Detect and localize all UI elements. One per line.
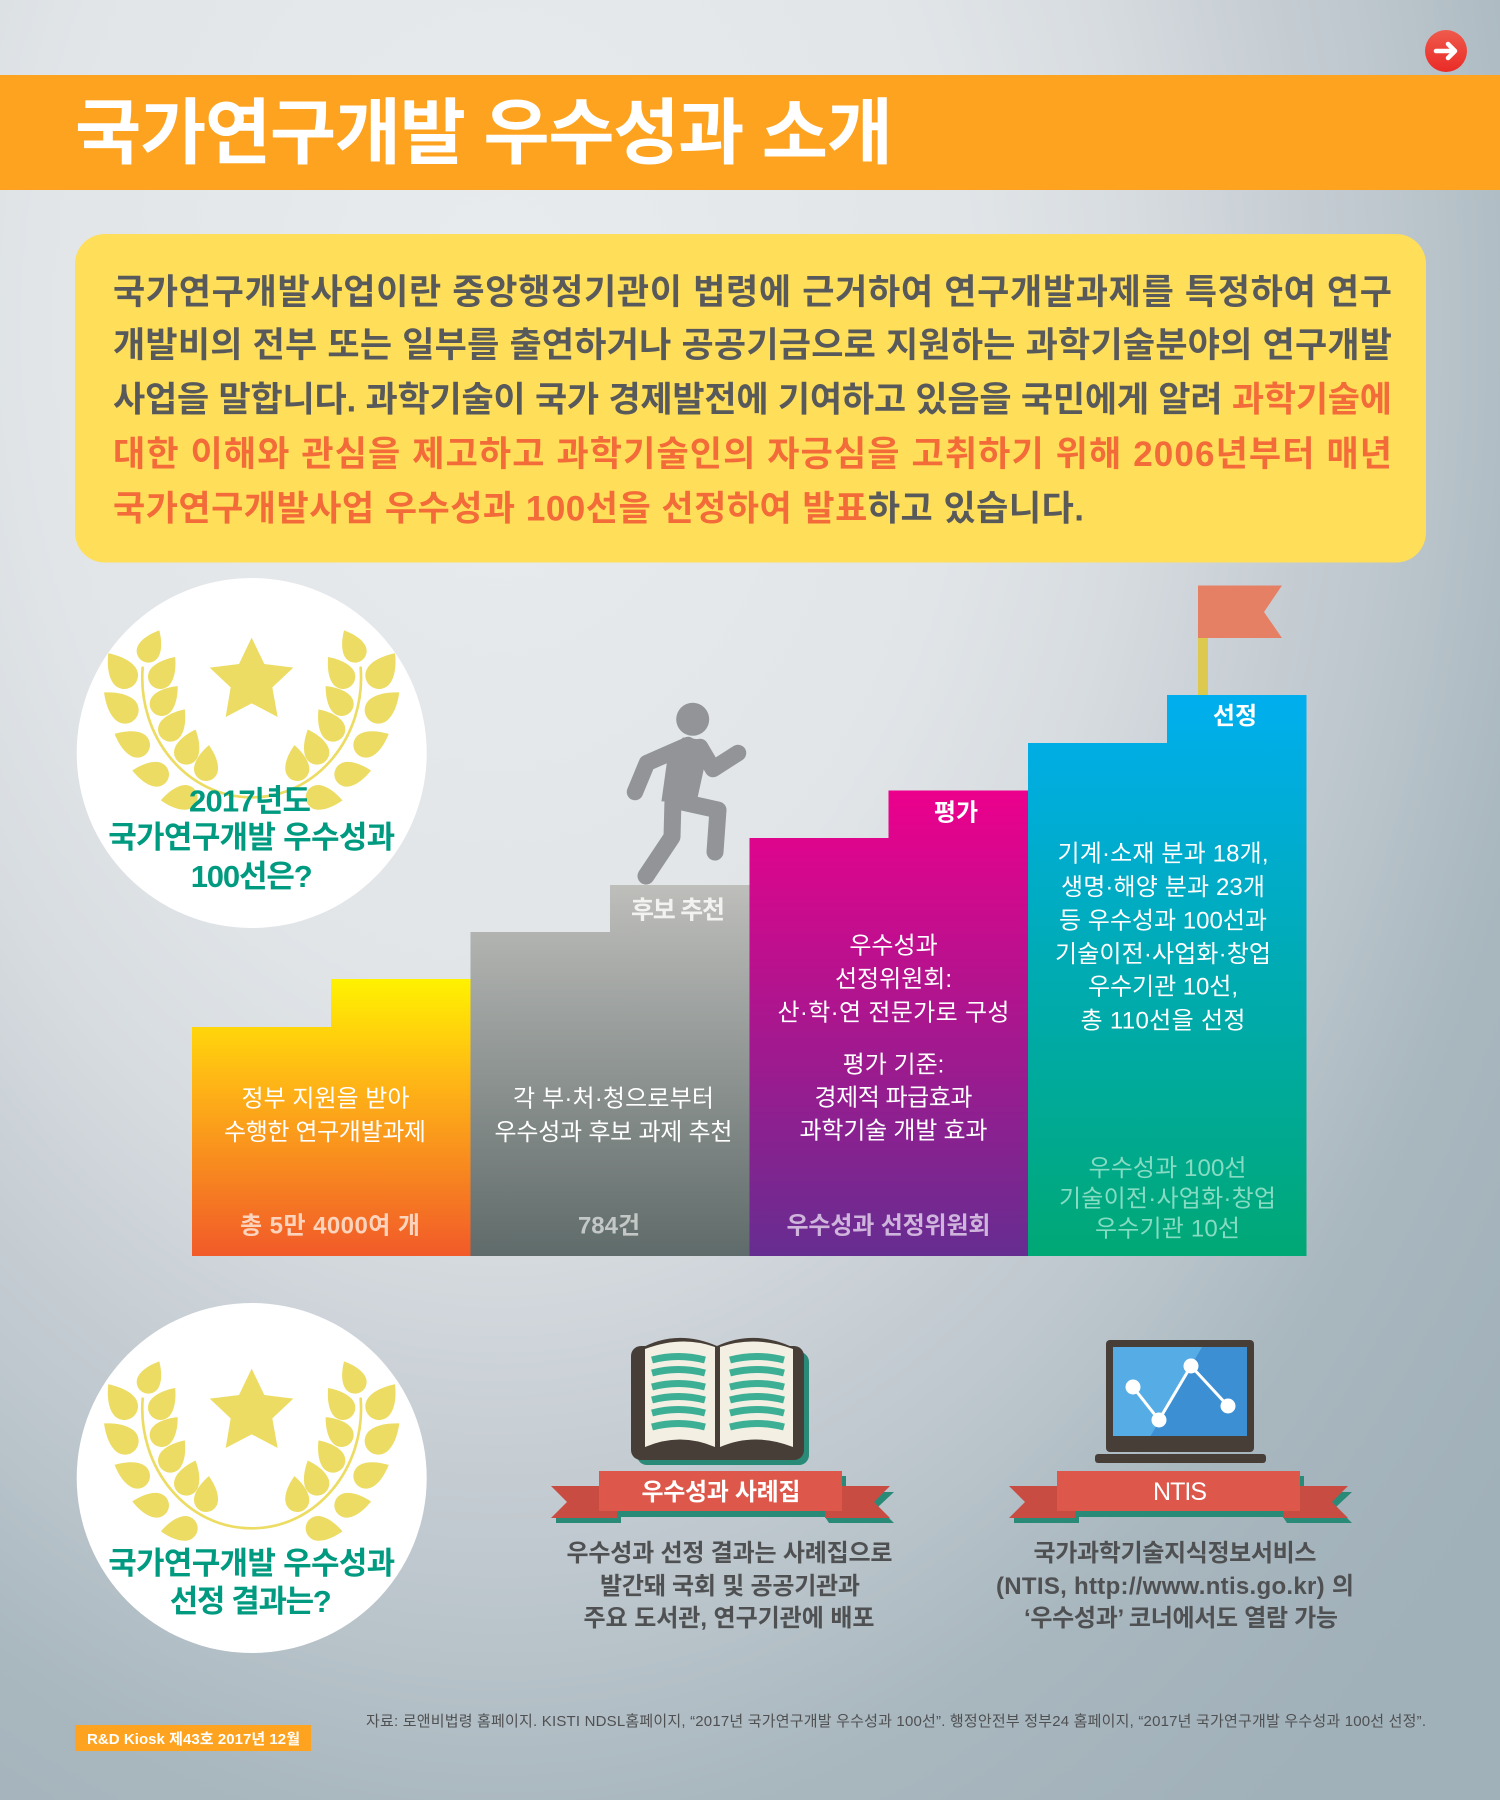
panel: 2017 badge <box>77 578 427 928</box>
step 4: final selection: 총 110선을 선정 <box>1080 1008 1246 1034</box>
step 2: candidate recommendation: 784건 <box>578 1212 640 1240</box>
panel: introduction <box>75 234 1426 562</box>
step 4: final selection: 선정 <box>1213 703 1257 730</box>
step 4: final selection: 등 우수성과 100선과 <box>1059 908 1267 934</box>
step 4: final selection: 생명·해양 분과 23개 <box>1061 874 1265 901</box>
icon: laurel wreath with star <box>95 625 408 813</box>
issue tag: R&D Kiosk 제43호 2017년 12월 <box>87 1731 300 1748</box>
badge question text: 국가연구개발 우수성과 <box>108 820 395 855</box>
title banner: 국가연구개발 우수성과 소개 <box>75 94 893 174</box>
step 3: evaluation: 경제적 파급효과 <box>814 1084 972 1112</box>
step 4: final selection: 우수성과 100선 <box>1088 1155 1246 1182</box>
step 1: research projects: 총 5만 4000여 개 <box>240 1212 420 1240</box>
step 3: evaluation: 우수성과 <box>849 932 938 960</box>
step 4: final selection: 기술이전·사업화·창업 <box>1055 941 1271 968</box>
step 4: final selection <box>1028 695 1306 1256</box>
badge question text <box>108 784 395 894</box>
step 3: evaluation: 평가 <box>934 800 978 826</box>
step 2: candidate recommendation <box>470 885 750 1256</box>
issue tag <box>75 1725 311 1751</box>
text: NTIS description: ‘우수성과’ 코너에서도 열람 가능 <box>1024 1605 1338 1632</box>
step 3: evaluation: 산·학·연 전문가로 구성 <box>778 1000 1010 1026</box>
icon: laptop with line chart <box>1095 1340 1266 1463</box>
ribbon: NTIS <box>1009 1471 1352 1523</box>
panel: introduction: 국가연구개발사업 우수성과 100선을 선정하여 발표하고 있습니다. <box>113 490 1084 528</box>
panel: introduction: 대한 이해와 관심을 제고하고 과학기술인의 자긍심을 고취하기 위해 2006년부터 매년 <box>113 435 1392 474</box>
step 1: research projects: 정부 지원을 받아 <box>242 1086 409 1112</box>
step 3: evaluation <box>750 790 1028 1256</box>
icon: open book <box>631 1338 809 1465</box>
step 3: evaluation: 과학기술 개발 효과 <box>800 1118 988 1144</box>
panel: introduction: 국가연구개발사업이란 중앙행정기관이 법령에 근거하여 연구개발과제를 특정하여 연구 <box>113 273 1392 312</box>
ribbon: case collection: 우수성과 사례집 <box>642 1479 800 1506</box>
step 4: final selection: 기계·소재 분과 18개, <box>1058 840 1268 868</box>
text: NTIS description: 국가과학기술지식정보서비스 <box>1034 1540 1316 1567</box>
badge question text <box>108 1546 395 1619</box>
text: case collection description: 주요 도서관, 연구기관에 배포 <box>584 1605 874 1632</box>
text: case collection description: 발간돼 국회 및 공공기관과 <box>600 1573 860 1600</box>
step 4: final selection: 우수기관 10선, <box>1088 974 1238 1000</box>
chart: selection staircase <box>192 695 1306 1256</box>
badge question text: 국가연구개발 우수성과 <box>108 1546 395 1581</box>
title banner <box>0 75 1500 190</box>
ribbon: case collection <box>551 1471 894 1523</box>
step 1: research projects <box>192 979 470 1256</box>
step 4: final selection: 우수기관 10선 <box>1095 1216 1240 1242</box>
source note: 자료: 로앤비법령 홈페이지. KISTI NDSL홈페이지, “2017년 국가연구개발 우수성과 100선”. 행정안전부 정부24 홈페이지, “2017년 국가연구개발 우수성과 100선 선정”. <box>366 1712 1426 1730</box>
text: case collection description <box>566 1540 892 1632</box>
panel: introduction: 개발비의 전부 또는 일부를 출연하거나 공공기금으로 지원하는 과학기술분야의 연구개발 <box>113 326 1392 365</box>
panel: results badge <box>77 1303 427 1653</box>
step 3: evaluation: 평가 기준: <box>843 1052 944 1078</box>
badge question text: 100선은? <box>191 859 313 894</box>
step 3: evaluation: 우수성과 선정위원회 <box>786 1212 990 1240</box>
icon: running person <box>635 703 738 876</box>
icon: laurel wreath with star <box>95 1356 408 1544</box>
step 2: candidate recommendation: 후보 추천 <box>631 896 725 924</box>
badge question text: 2017년도 <box>189 784 311 818</box>
step 3: evaluation: 선정위원회: <box>835 966 952 993</box>
step 4: final selection: 기술이전·사업화·창업 <box>1059 1186 1276 1212</box>
step 1: research projects: 수행한 연구개발과제 <box>224 1119 426 1146</box>
icon: goal flag <box>1198 586 1282 695</box>
text: NTIS description: (NTIS, http://www.ntis.go.kr) 의 <box>996 1573 1354 1600</box>
step 2: candidate recommendation: 각 부·처·청으로부터 <box>513 1086 714 1112</box>
text: NTIS description <box>996 1540 1354 1632</box>
panel: introduction: 사업을 말합니다. 과학기술이 국가 경제발전에 기여하고 있음을 국민에게 알려 과학기술에 <box>113 380 1392 420</box>
step 2: candidate recommendation: 우수성과 후보 과제 추천 <box>494 1119 732 1146</box>
text: case collection description: 우수성과 선정 결과는 사례집으로 <box>566 1540 892 1567</box>
ribbon: NTIS: NTIS <box>1153 1478 1207 1506</box>
icon: next arrow button <box>1425 30 1467 72</box>
badge question text: 선정 결과는? <box>170 1584 332 1619</box>
